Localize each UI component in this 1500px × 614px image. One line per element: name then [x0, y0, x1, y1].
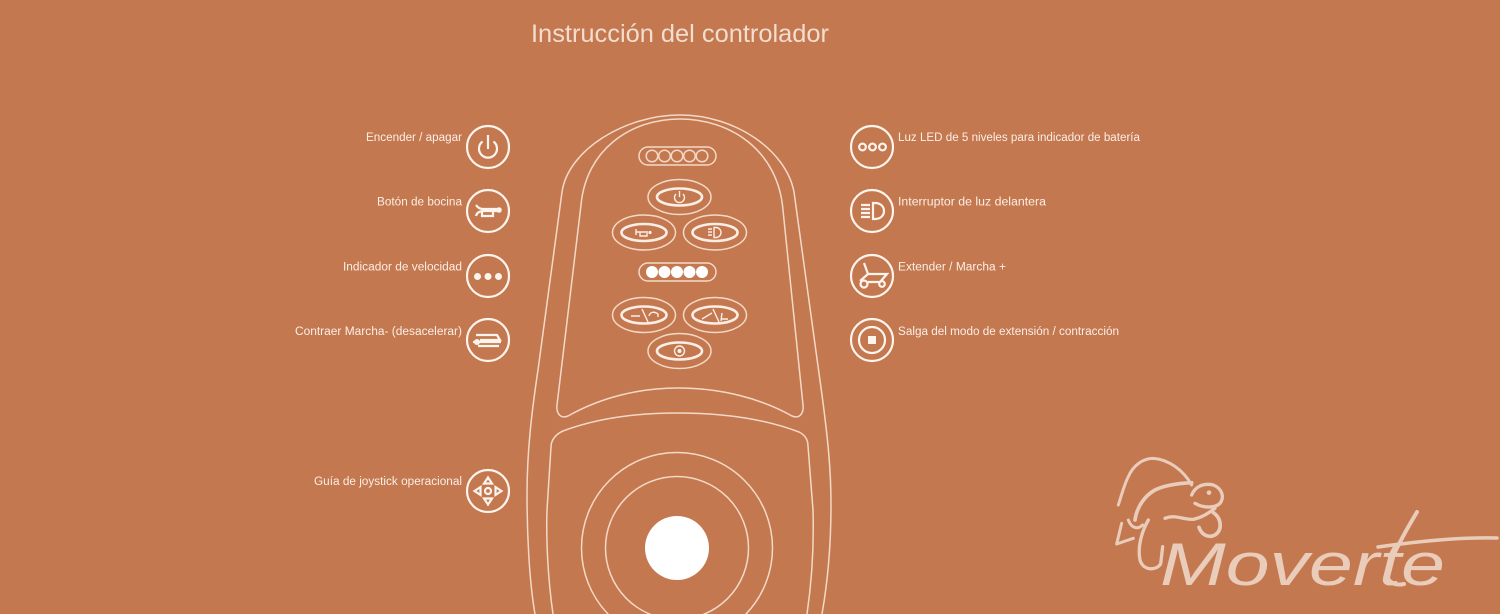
battery LED strip: [639, 147, 716, 165]
icon: joystick directions: [467, 470, 509, 512]
icon: extend chair: [851, 255, 893, 297]
left label: power: Encender / apagar: [366, 132, 462, 144]
joystick knob: [645, 516, 709, 580]
joystick inner ring: [606, 476, 748, 614]
controller outer shell: [527, 115, 831, 614]
joystick outer ring: [582, 452, 772, 614]
icon: headlight: [851, 190, 893, 232]
right label: exit mode: Salga del modo de extensión / contracción: [898, 326, 1119, 338]
left label: retract: Contraer Marcha- (desacelerar): [295, 326, 462, 338]
icon: retract chair: [467, 319, 509, 361]
icon: exit mode: [851, 319, 893, 361]
button: extend: [684, 298, 746, 332]
button: horn: [612, 215, 676, 250]
right label: extend: Extender / Marcha +: [898, 262, 1006, 274]
speed indicator strip: [639, 263, 716, 281]
logo t stem: [1387, 512, 1417, 584]
lower joystick panel outline: [547, 413, 813, 614]
upper control panel outline: [557, 119, 803, 417]
button: power: [648, 180, 711, 214]
title: Instrucción del controlador: [531, 20, 829, 48]
right label: battery: Luz LED de 5 niveles para indicador de batería: [898, 132, 1141, 144]
icon: battery LEDs: [851, 126, 893, 168]
button: headlight: [684, 215, 746, 250]
icon: horn: [467, 190, 509, 232]
left label: horn: Botón de bocina: [377, 196, 463, 208]
left label: speed indicator: Indicador de velocidad: [343, 262, 462, 274]
icon: power: [467, 126, 509, 168]
left label: joystick: Guía de joystick operacional: [314, 476, 462, 488]
logo swoosh: [1378, 538, 1497, 547]
button: exit mode: [648, 334, 711, 368]
icon: speed dots: [467, 255, 509, 297]
logo turtle drawing: [1117, 458, 1222, 569]
controller illustration: [527, 115, 831, 614]
button: retract: [612, 298, 676, 332]
logo: Moverte turtle: [1117, 458, 1497, 598]
logo wordmark: Moverte: [1160, 531, 1445, 598]
right label: headlight: Interruptor de luz delantera: [898, 196, 1047, 208]
